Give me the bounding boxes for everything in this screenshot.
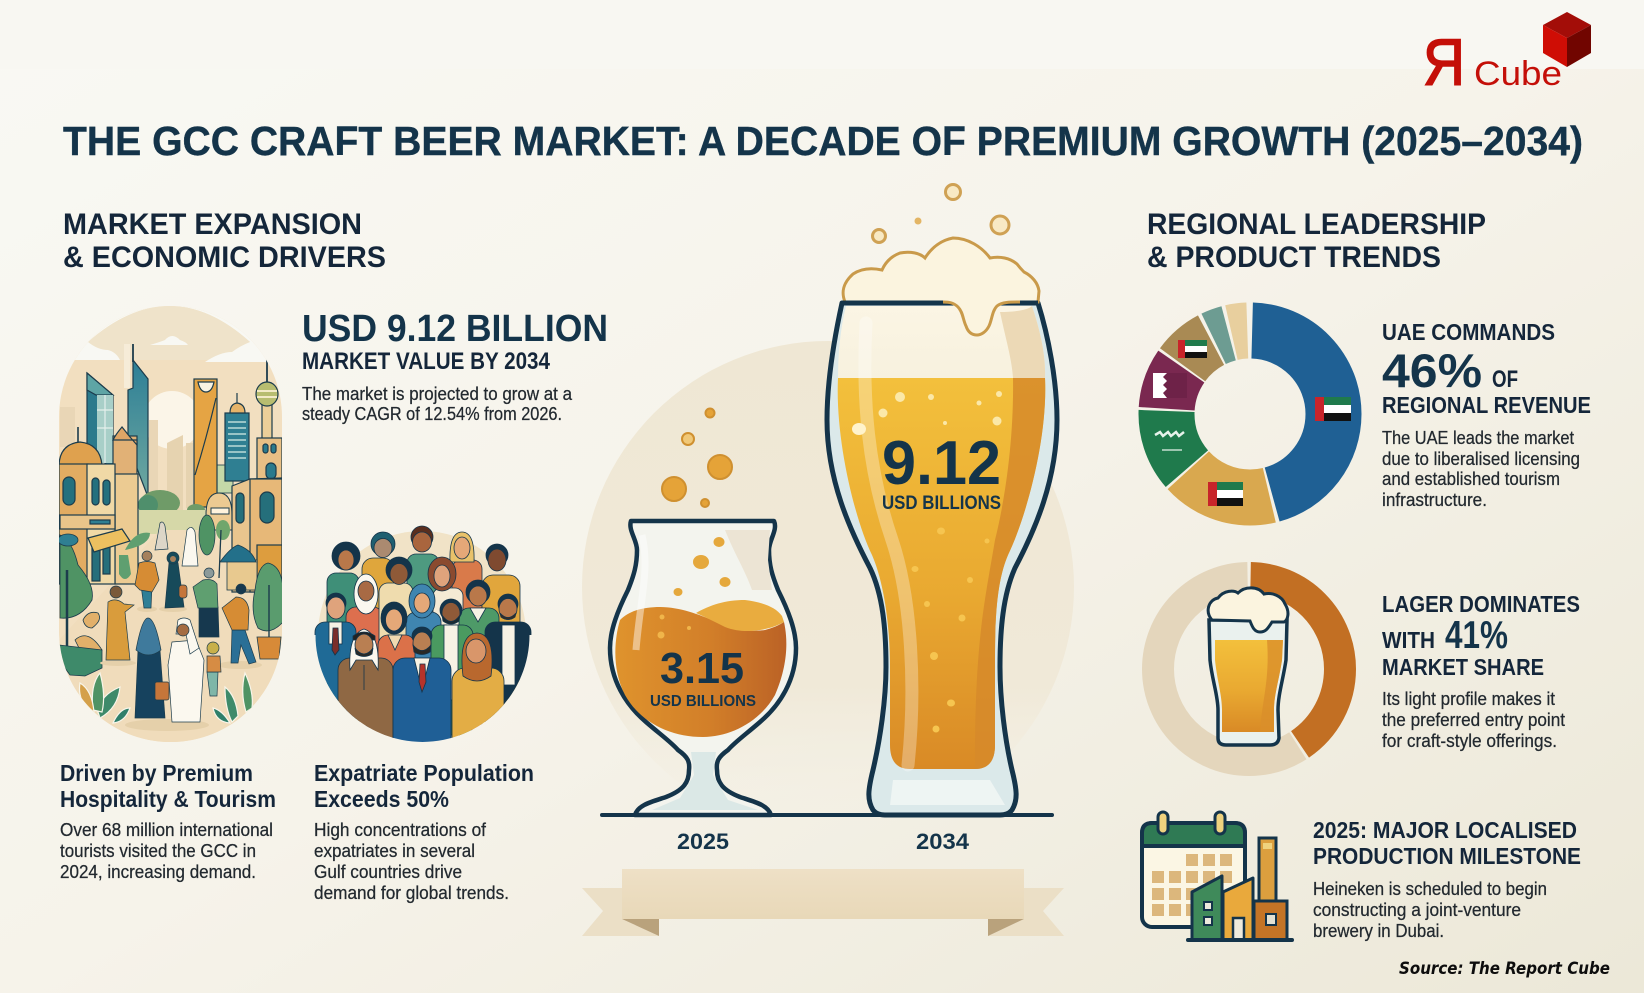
text block: expatriate population: Exceeds 50%	[314, 786, 449, 812]
text block: hospitality and tourism: Driven by Premium	[60, 760, 253, 786]
text block: lager share: Its light profile makes it	[1382, 688, 1555, 709]
text block: hospitality and tourism: Hospitality & Tourism	[60, 786, 276, 812]
text block: hospitality and tourism	[60, 760, 276, 882]
heading: market expansion: MARKET EXPANSION	[63, 208, 362, 241]
ribbon banner	[582, 869, 1064, 936]
illustration: diverse expatriate crowd	[315, 526, 531, 753]
text block: lager share: for craft-style offerings.	[1382, 730, 1557, 751]
icon: Saudi flag marks	[1155, 432, 1184, 450]
chart: 2034 pilsner glass: 9.12	[882, 429, 1001, 498]
chart: 2025 snifter glass	[610, 521, 796, 815]
text block: UAE share: and established tourism	[1382, 468, 1560, 489]
text block: expatriate population: High concentrations of	[314, 819, 487, 840]
text block: hospitality and tourism: tourists visited the GCC in	[60, 840, 256, 861]
trees and planters	[58, 534, 283, 676]
chart: 2025 snifter glass: 3.15	[660, 644, 744, 693]
icon: UAE flag on gold segment	[1208, 482, 1243, 506]
icon: lager glass	[1208, 588, 1288, 745]
text block: expatriate population: Gulf countries drive	[314, 861, 462, 882]
text block: lager share: MARKET SHARE	[1382, 654, 1544, 680]
bubbles above 2034 glass	[872, 184, 1009, 242]
building: left glass tower	[87, 373, 113, 470]
chart: lager share donut	[1158, 578, 1340, 760]
palm leaves	[80, 673, 252, 723]
text block: expatriate population: expatriates in several	[314, 840, 475, 861]
building: central arcade	[206, 493, 232, 530]
source note: Source: The Report Cube	[1399, 959, 1610, 979]
heading: regional leadership	[1147, 208, 1486, 274]
building: kingdom tower	[194, 379, 217, 507]
building: TV tower	[256, 350, 282, 480]
title: THE GCC CRAFT BEER MARKET: A DECADE OF PREMIUM GROWTH (2025–2034)	[63, 118, 1583, 164]
illustration: city street with tourists	[55, 306, 285, 760]
text block: production milestone: Heineken is scheduled to begin	[1313, 878, 1547, 899]
logo: RCube: Cube	[1474, 55, 1562, 93]
stat block: market value: The market is projected to grow at a	[302, 383, 573, 404]
front row	[338, 658, 394, 738]
text block: hospitality and tourism: Over 68 million international	[60, 819, 273, 840]
bubbles above 2025 glass	[662, 408, 732, 507]
text block: UAE share: 46%	[1382, 344, 1482, 397]
stat block: market value: USD 9.12 BILLION	[302, 308, 608, 350]
text block: lager share: LAGER DOMINATES	[1382, 591, 1580, 617]
stat block: market value: steady CAGR of 12.54% from 2026.	[302, 403, 562, 424]
chart: regional revenue donut	[1153, 330, 1351, 506]
text block: UAE share: infrastructure.	[1382, 489, 1487, 510]
text block: lager share: 41%	[1445, 614, 1508, 657]
figures: tourists and residents	[106, 522, 256, 722]
back row	[327, 573, 359, 743]
icon: UAE flag on blue segment	[1315, 397, 1351, 421]
text block: UAE share: UAE COMMANDS	[1382, 319, 1555, 345]
text block: UAE share: OF	[1492, 366, 1518, 393]
text block: production milestone: constructing a joint-venture	[1313, 899, 1521, 920]
text block: expatriate population: demand for global trends.	[314, 882, 509, 903]
heading: regional leadership: & PRODUCT TRENDS	[1147, 241, 1441, 274]
stall with teal umbrella	[220, 545, 257, 590]
text block: expatriate population: Expatriate Population	[314, 760, 534, 786]
logo: RCube: Я	[1423, 25, 1465, 99]
text block: lager share: WITH	[1382, 627, 1435, 653]
text block: UAE share: REGIONAL REVENUE	[1382, 392, 1591, 418]
icon: Qatar flag	[1153, 373, 1187, 398]
stat block: market value	[302, 308, 608, 424]
heading: market expansion	[63, 208, 386, 274]
icon: calendar and brewery	[1142, 812, 1294, 942]
building: left domed building	[59, 427, 138, 584]
text block: lager share	[1382, 591, 1580, 751]
text block: production milestone: 2025: MAJOR LOCALISED	[1313, 817, 1577, 843]
heading: regional leadership: REGIONAL LEADERSHIP	[1147, 208, 1486, 241]
chart: 2034 pilsner glass: USD BILLIONS	[882, 493, 1001, 514]
building: right building	[232, 478, 282, 592]
middle row	[346, 607, 383, 717]
chart: 2034 pilsner glass	[827, 238, 1057, 815]
label: 2034: 2034	[916, 829, 970, 854]
text block: lager share: the preferred entry point	[1382, 709, 1565, 730]
text block: UAE share: The UAE leads the market	[1382, 427, 1574, 448]
label: 2025: 2025	[677, 829, 729, 854]
heading: market expansion: & ECONOMIC DRIVERS	[63, 241, 386, 274]
baseline shelf	[600, 813, 1054, 817]
shadows on ground	[100, 606, 262, 731]
text block: expatriate population	[314, 760, 534, 903]
logo: RCube	[1423, 12, 1591, 99]
text block: production milestone: brewery in Dubai.	[1313, 920, 1444, 941]
text block: UAE share: due to liberalised licensing	[1382, 448, 1580, 469]
building: striped tower	[225, 393, 249, 481]
text block: UAE share	[1382, 319, 1591, 510]
text block: hospitality and tourism: 2024, increasing demand.	[60, 861, 256, 882]
stat block: market value: MARKET VALUE BY 2034	[302, 348, 551, 375]
chart: 2025 snifter glass: USD BILLIONS	[650, 693, 756, 710]
building: tall tower	[128, 344, 148, 497]
backdrop disc behind glasses	[582, 341, 1074, 833]
text block: production milestone: PRODUCTION MILESTONE	[1313, 843, 1581, 869]
text block: production milestone	[1313, 817, 1581, 941]
icon: flag on brown segment	[1178, 340, 1207, 358]
